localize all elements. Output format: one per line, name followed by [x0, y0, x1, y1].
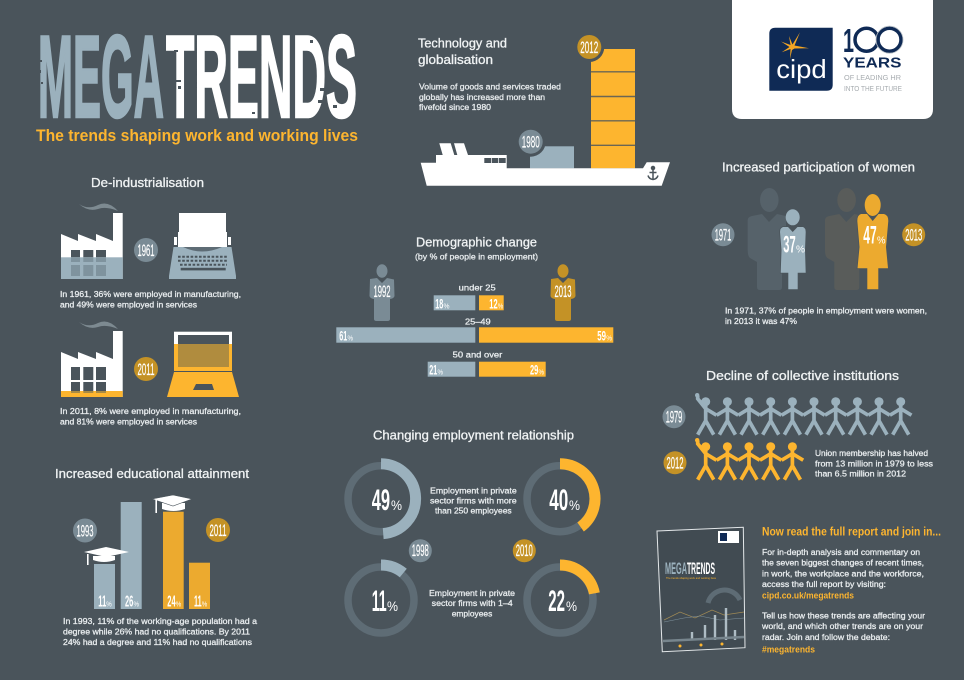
- bar chart: 11: [98, 594, 106, 611]
- year badge 2010: 2010: [516, 542, 533, 560]
- text 1961: In 1961, 36% were employed in manufacturing,: [60, 289, 241, 299]
- icon: woman 1971: [780, 209, 806, 289]
- text: large firms: than 250 employees: [435, 505, 512, 515]
- logo mark: cipd: [776, 54, 827, 84]
- text: small firms: Employment in private: [429, 588, 515, 598]
- icon: man 1971: [748, 188, 786, 290]
- donut: 40%: [527, 464, 595, 532]
- bar chart: 11: [194, 594, 202, 611]
- text: TRENDS: [166, 11, 357, 142]
- chart: container stack 2012: [591, 49, 635, 168]
- donut: 22%: [527, 565, 594, 633]
- icon: person 2013: 2013: [554, 283, 572, 301]
- year badge 2011: [134, 357, 158, 381]
- bar chart: 24: [167, 594, 176, 611]
- icon: woman 2013: %: [877, 235, 886, 246]
- donut: 11%: %: [387, 598, 398, 614]
- panel: de-industrialisation: [60, 175, 241, 426]
- text: small firms: employees: [452, 608, 492, 618]
- year badge 2010: [513, 539, 536, 562]
- icon: person 2013: [550, 264, 576, 321]
- text block: [761, 610, 925, 642]
- bar group: 50 and over: 21: [429, 361, 437, 377]
- donut: 11%: [348, 565, 414, 633]
- text block: in work, the workplace and the workforce,: [762, 569, 924, 579]
- text 2011: In 2011, 8% were employed in manufacturing,: [60, 406, 241, 416]
- text block: 24% had a degree and 11% had no qualifications: [63, 637, 252, 647]
- bar group: 25-49: [336, 316, 613, 344]
- subheading: (by % of people in employment): [415, 251, 538, 261]
- logo: 100 years: [843, 22, 903, 93]
- panel: CIPD logo: [732, 0, 933, 119]
- icon: woman 2013: [857, 194, 888, 289]
- text block: globally has increased more than: [419, 92, 545, 102]
- icon: woman 1971: 37: [783, 232, 796, 258]
- bar group: under 25: [434, 283, 504, 311]
- bar group: 25-49: 25–49: [465, 316, 491, 326]
- panel: technology and globalisation: [418, 32, 670, 186]
- text block: degree while 26% had no qualifications. By 2011: [63, 627, 250, 637]
- heading: Now read the full report and join in...: [762, 526, 941, 539]
- year badge 1980: [516, 127, 546, 157]
- panel: changing employment relationship: [348, 427, 595, 633]
- text block: radar. Join and follow the debate:: [762, 632, 890, 642]
- year badge 1980: 1980: [522, 134, 540, 152]
- year badge 1993: [73, 518, 97, 542]
- year badge 2011: [206, 518, 230, 542]
- bar group: under 25: %: [498, 301, 504, 310]
- pictogram: 2012 union members: [695, 438, 803, 480]
- text block: [725, 305, 927, 326]
- heading: Increased educational attainment: [55, 466, 249, 481]
- heading: De-industrialisation: [91, 175, 204, 190]
- icon: person 1992: 1992: [374, 283, 390, 301]
- text block: In 1993, 11% of the working-age population had a: [63, 616, 257, 626]
- text 2011: and 81% were employed in services: [60, 416, 197, 426]
- bar group: 50 and over: %: [538, 367, 544, 376]
- text block: In 1971, 37% of people in employment were women,: [725, 305, 927, 315]
- year badge 1998: 1998: [412, 542, 429, 560]
- year badge 1971: 1971: [715, 226, 731, 244]
- text block: Union membership has halved: [815, 448, 928, 458]
- heading: Increased participation of women: [722, 160, 915, 175]
- bar group: under 25: %: [444, 301, 450, 310]
- panel: educational attainment: [55, 466, 257, 647]
- year badge 2012: [664, 451, 686, 474]
- bar chart: [94, 502, 210, 611]
- text block: For in-depth analysis and commentary on: [762, 547, 920, 557]
- report cover: MEGA: [665, 559, 687, 578]
- year badge 2013: 2013: [905, 226, 922, 244]
- panel: read the report: [657, 526, 941, 655]
- subtitle: The trends shaping work and working lives: [36, 126, 358, 145]
- year badge 2012: [574, 32, 604, 62]
- text block: [762, 547, 924, 589]
- year badge 1993: 1993: [76, 522, 94, 540]
- icon: mortarboard 2011: [152, 495, 192, 513]
- year badge 2011: 2011: [138, 361, 154, 379]
- text block: than 6.5 million in 2012: [815, 469, 906, 479]
- icon: factory 1961: [61, 203, 123, 279]
- bar group: 25-49: 59: [597, 328, 606, 344]
- text block: fivefold since 1980: [419, 102, 491, 112]
- text 2011: [60, 406, 241, 426]
- text block: [815, 448, 933, 479]
- panel: collective institutions: [662, 368, 933, 480]
- year badge 1961: [134, 238, 158, 262]
- pictogram: 1979 union members: [695, 393, 912, 435]
- year badge 2011: 2011: [210, 522, 226, 540]
- donut: 40%: %: [569, 497, 580, 513]
- donut: 40%: 40: [549, 484, 568, 517]
- bar group: 25-49: %: [348, 334, 353, 343]
- text block: [419, 81, 561, 112]
- text: small firms: sector firms with 1–4: [432, 598, 513, 608]
- bar group: 50 and over: 50 and over: [453, 350, 502, 360]
- year badge 1998: [409, 539, 432, 562]
- logo: 100 years: YEARS: [843, 55, 902, 72]
- text: large firms: Employment in private: [430, 485, 517, 495]
- text block: from 13 million in 1979 to less: [815, 458, 933, 468]
- logo mark: [769, 28, 833, 91]
- text block: Tell us how these trends are affecting your: [762, 610, 925, 620]
- report cover: [657, 527, 745, 652]
- icon: typewriter: [169, 213, 236, 279]
- logo: 100 years: OF LEADING HR: [844, 73, 901, 82]
- text block: in 2013 it was 47%: [725, 316, 797, 326]
- heading: globalisation: [418, 52, 493, 67]
- donut: 49%: 49: [372, 484, 390, 517]
- year badge 1961: 1961: [138, 242, 154, 260]
- bar group: 50 and over: [428, 350, 546, 377]
- icon: woman 2013: 47: [863, 221, 877, 249]
- icon: woman 1971: %: [796, 244, 805, 256]
- heading: Demographic change: [416, 235, 537, 250]
- bar chart: %: [134, 600, 139, 609]
- year badge 2012: 2012: [666, 454, 684, 472]
- donut: 22%: %: [566, 598, 577, 614]
- donut: 49%: [348, 464, 416, 534]
- heading: Decline of collective institutions: [706, 368, 900, 383]
- bar group: 25-49: 61: [339, 328, 347, 344]
- year badge 2013: [902, 223, 925, 246]
- heading: Technology and: [418, 36, 507, 51]
- report cover: The trends shaping work and working lives: [666, 576, 717, 580]
- logo: 100 years: INTO THE FUTURE: [844, 84, 902, 93]
- text block: Volume of goods and services traded: [419, 81, 561, 91]
- text: large firms: [430, 485, 517, 515]
- text block: access the full report by visiting:: [762, 579, 886, 589]
- bar chart: 26: [125, 594, 133, 611]
- container 1980: [530, 146, 574, 168]
- text block: the seven biggest changes of recent times,: [762, 558, 924, 568]
- bar group: 25-49: %: [606, 334, 612, 343]
- bar group: 50 and over: %: [438, 367, 443, 376]
- icon: ship: [421, 143, 670, 186]
- icon: person 1992: [370, 264, 394, 321]
- logo: 100 years: 1: [843, 22, 854, 59]
- donut: 11%: 11: [372, 585, 387, 618]
- text block: [63, 616, 257, 647]
- icon: man 2013: [825, 188, 863, 290]
- text block: world, and which other trends are on your: [761, 621, 923, 631]
- icon: anchor: [648, 166, 658, 180]
- text 1961: and 49% were employed in services: [60, 300, 197, 310]
- icon: laptop: [167, 332, 239, 397]
- title: MEGA: [38, 11, 164, 142]
- donut: 22%: 22: [548, 585, 565, 618]
- icon: mortarboard 1993: [84, 547, 129, 565]
- heading: Changing employment relationship: [373, 427, 574, 442]
- icon: factory 2011: [61, 321, 123, 397]
- bar group: under 25: 18: [435, 295, 443, 311]
- text: small firms: [429, 588, 515, 618]
- bar group: under 25: 12: [489, 295, 498, 311]
- heading: [418, 36, 507, 67]
- year badge 1979: 1979: [666, 408, 682, 426]
- report cover: TRENDS: [687, 559, 715, 578]
- year badge 1971: [712, 223, 734, 246]
- year badge 1979: [662, 405, 686, 428]
- link: cipd.co.uk/megatrends: [762, 590, 854, 600]
- hashtag: #megatrends: [762, 645, 815, 655]
- panel: participation of women: [712, 160, 927, 326]
- text 1961: [60, 289, 241, 310]
- bar chart: %: [202, 600, 208, 609]
- panel: demographic change: [336, 235, 613, 377]
- year badge 2012: 2012: [580, 39, 598, 57]
- bar group: under 25: under 25: [459, 283, 496, 293]
- donut: 49%: %: [391, 497, 402, 513]
- bar chart: %: [106, 600, 112, 609]
- bar chart: %: [176, 600, 182, 609]
- bar group: 50 and over: 29: [530, 361, 538, 377]
- text: large firms: sector firms with more: [430, 495, 517, 505]
